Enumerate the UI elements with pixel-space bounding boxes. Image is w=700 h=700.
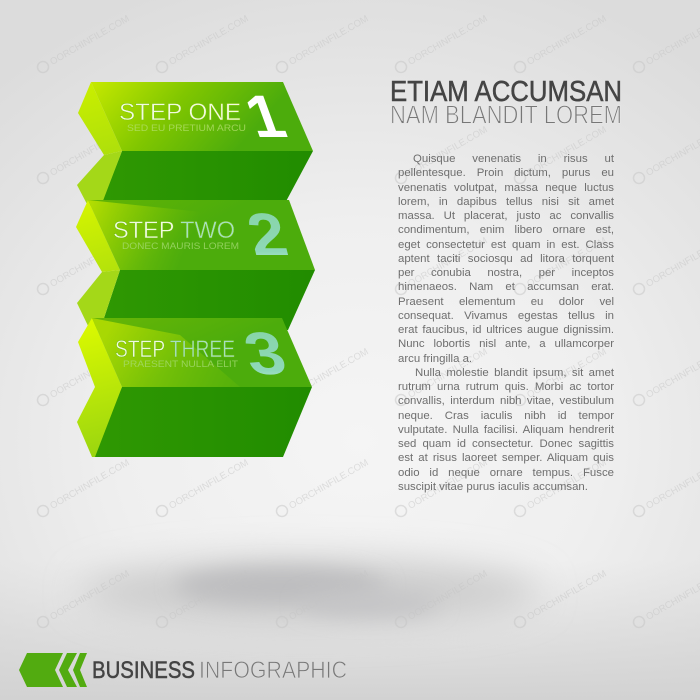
- watermarks: OORCHINFILE.COM: [525, 346, 609, 401]
- footer title: business: BUSINESS: [92, 657, 195, 684]
- body text: est at risus laoreet semper. Aliquam quis: [398, 452, 614, 464]
- watermarks: OORCHINFILE.COM: [406, 13, 490, 68]
- step two subtitle: DONEC MAURIS LOREM: [122, 241, 239, 252]
- body text: venenatis volutpat, massa neque luctus: [398, 182, 614, 194]
- body text: suscipit vitae purus iaculis accumsan.: [398, 481, 588, 493]
- step two number: 2: [240, 201, 294, 268]
- step two top face: [88, 200, 315, 270]
- watermarks: OORCHINFILE.COM: [525, 13, 609, 68]
- icon: footer chevrons: [19, 653, 87, 687]
- body text: eget consectetur est quam in est. Class: [398, 238, 614, 250]
- watermarks: OORCHINFILE.COM: [48, 13, 132, 68]
- step three top face: [92, 318, 312, 387]
- step two upper side: [76, 200, 120, 272]
- step one top face: [91, 82, 313, 151]
- subheading: NAM BLANDIT LOREM: [390, 100, 622, 130]
- watermarks: OORCHINFILE.COM: [406, 235, 490, 290]
- watermarks: OORCHINFILE.COM: [48, 568, 132, 623]
- step three lower face: [95, 387, 312, 457]
- step one lower face: [100, 151, 313, 207]
- body text: per conubia nostra, per inceptos: [398, 267, 614, 279]
- watermarks: OORCHINFILE.COM: [167, 13, 251, 68]
- watermarks: OORCHINFILE.COM: [525, 568, 609, 623]
- watermarks: OORCHINFILE.COM: [525, 457, 609, 512]
- body text: massa. Ut placerat, justo ac convallis: [398, 210, 614, 222]
- watermarks: OORCHINFILE.COM: [406, 346, 490, 401]
- body text: Praesent elementum eu dolor vel: [398, 296, 614, 308]
- body text: Nunc lobortis nisl ante, a ullamcorper: [398, 338, 614, 350]
- watermarks: OORCHINFILE.COM: [525, 124, 609, 179]
- body text: pellentesque. Proin dictum, purus eu: [398, 167, 614, 179]
- panel: step three block: [77, 318, 312, 457]
- step three upper side: [78, 318, 122, 387]
- step three number: 3: [238, 320, 293, 387]
- body text: lorem, in dapibus tellus nisi sit amet: [398, 196, 614, 208]
- step one number: 1: [237, 84, 294, 151]
- step two light beam: [88, 200, 250, 270]
- body text: rutrum urna rutrum quis. Morbi ac tortor: [398, 381, 614, 393]
- step one title: STEP ONE: [119, 99, 241, 126]
- body text: convallis, interdum nibh vitae, vestibulum: [398, 395, 614, 407]
- watermarks: OORCHINFILE.COM: [287, 568, 371, 623]
- panel: step two block: [76, 200, 315, 330]
- body text: consequat. Vivamus egestas tellus in: [398, 310, 614, 322]
- body text: odio id neque ornare tempus. Fusce: [398, 466, 614, 478]
- floor shadow: [80, 558, 540, 626]
- watermarks: OORCHINFILE.COM: [525, 235, 609, 290]
- watermarks: OORCHINFILE.COM: [48, 124, 132, 179]
- step two lower face: [100, 270, 315, 330]
- step one lower side: [77, 151, 122, 206]
- step one subtitle: SED EU PRETIUM ARCU: [127, 123, 246, 134]
- step two title: STEP TWO: [113, 217, 235, 244]
- body text: Quisque venenatis in risus ut: [413, 153, 614, 165]
- body text: himenaeos. Nam et accumsan erat.: [398, 281, 614, 293]
- body text: sed quam id consectetur. Donec sagittis: [398, 438, 614, 450]
- step three title: STEP THREE: [115, 336, 235, 363]
- watermarks: OORCHINFILE.COM: [48, 346, 132, 401]
- watermarks: OORCHINFILE.COM: [287, 346, 371, 401]
- watermarks: OORCHINFILE.COM: [167, 457, 251, 512]
- body text: Nulla molestie blandit ipsum, sit amet: [415, 367, 614, 379]
- body text: arcu fringilla a.: [398, 352, 472, 364]
- watermarks: OORCHINFILE.COM: [406, 568, 490, 623]
- body text: [398, 153, 614, 493]
- step three subtitle: PRAESENT NULLA ELIT: [123, 359, 238, 370]
- body text: vulputate. Nulla facilisi. Aliquam hendrerit: [398, 424, 614, 436]
- heading: ETIAM ACCUMSAN: [390, 76, 622, 108]
- footer title: infographic: INFOGRAPHIC: [199, 657, 347, 684]
- step one upper side: [78, 82, 122, 155]
- watermarks: OORCHINFILE.COM: [167, 568, 251, 623]
- step three light beam: [92, 318, 240, 387]
- watermarks: OORCHINFILE.COM: [406, 124, 490, 179]
- body text: neque. Cras iaculis nibh id tempor: [398, 410, 614, 422]
- step three lower side: [77, 387, 122, 457]
- watermarks: OORCHINFILE.COM: [287, 457, 371, 512]
- watermarks: OORCHINFILE.COM: [406, 457, 490, 512]
- step two lower side: [77, 270, 120, 330]
- watermarks: OORCHINFILE.COM: [48, 457, 132, 512]
- panel: step one block: [77, 82, 313, 207]
- watermarks: OORCHINFILE.COM: [48, 235, 132, 290]
- body text: erat faucibus, id ultrices augue dignissim.: [398, 324, 614, 336]
- body text: condimentum, enim libero ornare est,: [398, 224, 614, 236]
- watermarks: OORCHINFILE.COM: [287, 13, 371, 68]
- body text: aptent taciti sociosqu ad litora torquent: [398, 253, 614, 265]
